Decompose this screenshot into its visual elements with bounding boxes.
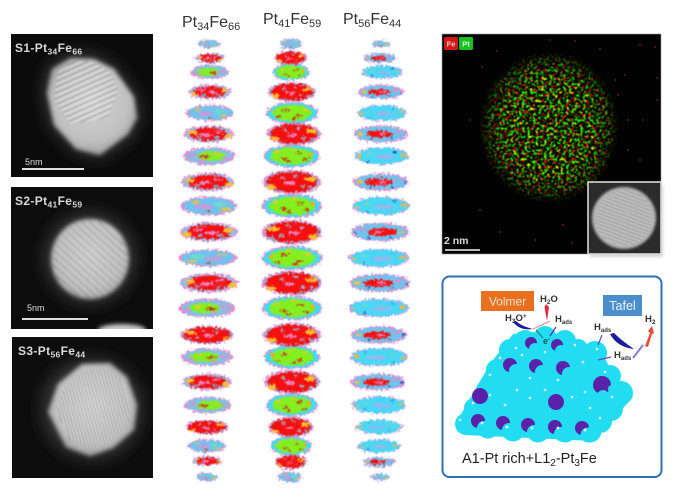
label: H2O: O xyxy=(550,294,558,305)
arrow: Volmer link xyxy=(533,321,550,329)
label: S2: Fe xyxy=(58,194,72,208)
scale bar: S2: 5nm xyxy=(27,303,45,313)
heading: Pt41Fe59: Pt xyxy=(263,11,278,28)
label: Hads Volmer: H xyxy=(555,314,562,325)
label: Tafel xyxy=(603,295,642,316)
label: electron: - xyxy=(548,337,550,343)
label: S2: 41 xyxy=(47,200,58,210)
catalyst surface atoms xyxy=(455,326,633,442)
formula label: -Pt xyxy=(556,451,574,467)
scale bar: S2 xyxy=(22,303,88,320)
heading: Pt56Fe44: Pt xyxy=(343,11,358,28)
label: H2: H xyxy=(645,314,652,325)
formula label: A1-Pt rich+L1 xyxy=(462,451,550,467)
heading: Pt34Fe66: Fe xyxy=(209,14,228,31)
label: H3O+: + xyxy=(523,313,527,320)
arrow: H3O+ to surface xyxy=(513,321,533,329)
legend tag: Pt xyxy=(459,37,473,50)
arrow: Tafel link xyxy=(633,345,643,358)
label: Hads Tafel upper: H xyxy=(594,322,601,333)
label: H2O: H xyxy=(540,294,547,305)
formula label: 2 xyxy=(550,458,556,469)
label: Hads Volmer: ads xyxy=(562,320,573,326)
label: S3: 44 xyxy=(75,350,85,360)
heading: Pt34Fe66: 66 xyxy=(228,21,240,33)
label: S2: 59 xyxy=(72,200,82,210)
label: H3O+: O xyxy=(516,313,523,324)
panel: S2 TEM image xyxy=(11,187,153,336)
heading: Pt56Fe44: 44 xyxy=(389,18,401,30)
EDS particle: Fe and Pt signal xyxy=(479,51,619,203)
heading: Pt41Fe59: 41 xyxy=(278,18,290,30)
label: S1: 66 xyxy=(72,46,82,56)
chart: Pt56Fe44 atomic layer slices xyxy=(349,41,410,480)
purple Fe atoms xyxy=(471,337,611,435)
legend tag: Pt: Pt xyxy=(462,40,470,48)
label: H2O: 2 xyxy=(547,299,551,306)
panel: HER mechanism schematic xyxy=(442,276,662,477)
arrow: Tafel lower Hads xyxy=(598,357,611,360)
heading: Pt34Fe66: 34 xyxy=(197,21,209,33)
legend tag: Fe xyxy=(444,37,458,50)
label: electron: e xyxy=(543,336,548,346)
label: Hads Tafel lower: H xyxy=(614,350,621,361)
formula label: 3 xyxy=(574,458,580,469)
panel: EDS elemental map xyxy=(442,34,663,257)
label: Tafel: Tafel xyxy=(609,299,636,313)
heading: Pt41Fe59: 59 xyxy=(309,18,321,30)
label: H3O+: H xyxy=(505,313,512,324)
label: S1: Fe xyxy=(58,41,72,55)
arrow: electron path xyxy=(536,330,543,338)
arrow: Hads to surface xyxy=(550,327,556,336)
scale bar: S1: 5nm xyxy=(25,157,43,167)
scale bar: 2 nm: 2 nm xyxy=(444,235,469,247)
heading: Pt34Fe66: Pt xyxy=(182,14,197,31)
chart: Pt34Fe66 atomic layer slices xyxy=(179,40,238,481)
label: S1: 34 xyxy=(47,46,58,56)
inset: TEM image xyxy=(588,182,663,257)
label: S1: S1-Pt xyxy=(15,41,47,55)
label: Hads Tafel lower: ads xyxy=(621,356,632,362)
label: S3: S3-Pt xyxy=(18,344,50,358)
scale bar: 2 nm xyxy=(444,235,480,251)
label: S2: S2-Pt xyxy=(15,194,47,208)
arrow: H2 release xyxy=(645,326,654,347)
heading: Pt56Fe44: 56 xyxy=(358,18,370,30)
heading: Pt56Fe44: Fe xyxy=(370,11,389,28)
arrow: H2O release xyxy=(544,304,549,321)
label: Volmer: Volmer xyxy=(489,294,526,308)
panel: S3 TEM image xyxy=(12,337,153,478)
label: Hads Tafel upper: ads xyxy=(601,328,612,334)
background noise dots xyxy=(469,39,658,244)
label: H3O+: 3 xyxy=(512,318,516,325)
label: S3: 56 xyxy=(50,350,61,360)
label: Volmer xyxy=(481,291,534,311)
formula label: Fe xyxy=(580,451,597,467)
heading: Pt41Fe59: Fe xyxy=(290,11,309,28)
label: H2: 2 xyxy=(652,319,656,326)
arrow: Tafel recombination xyxy=(610,333,634,349)
scale bar: S1 xyxy=(22,158,84,170)
legend tag: Fe: Fe xyxy=(447,40,455,48)
chart: Pt41Fe59 atomic layer slices xyxy=(262,39,322,482)
arrow: Tafel upper Hads xyxy=(598,335,602,345)
panel: S1 TEM image xyxy=(11,34,153,177)
label: S3: Fe xyxy=(61,344,75,358)
